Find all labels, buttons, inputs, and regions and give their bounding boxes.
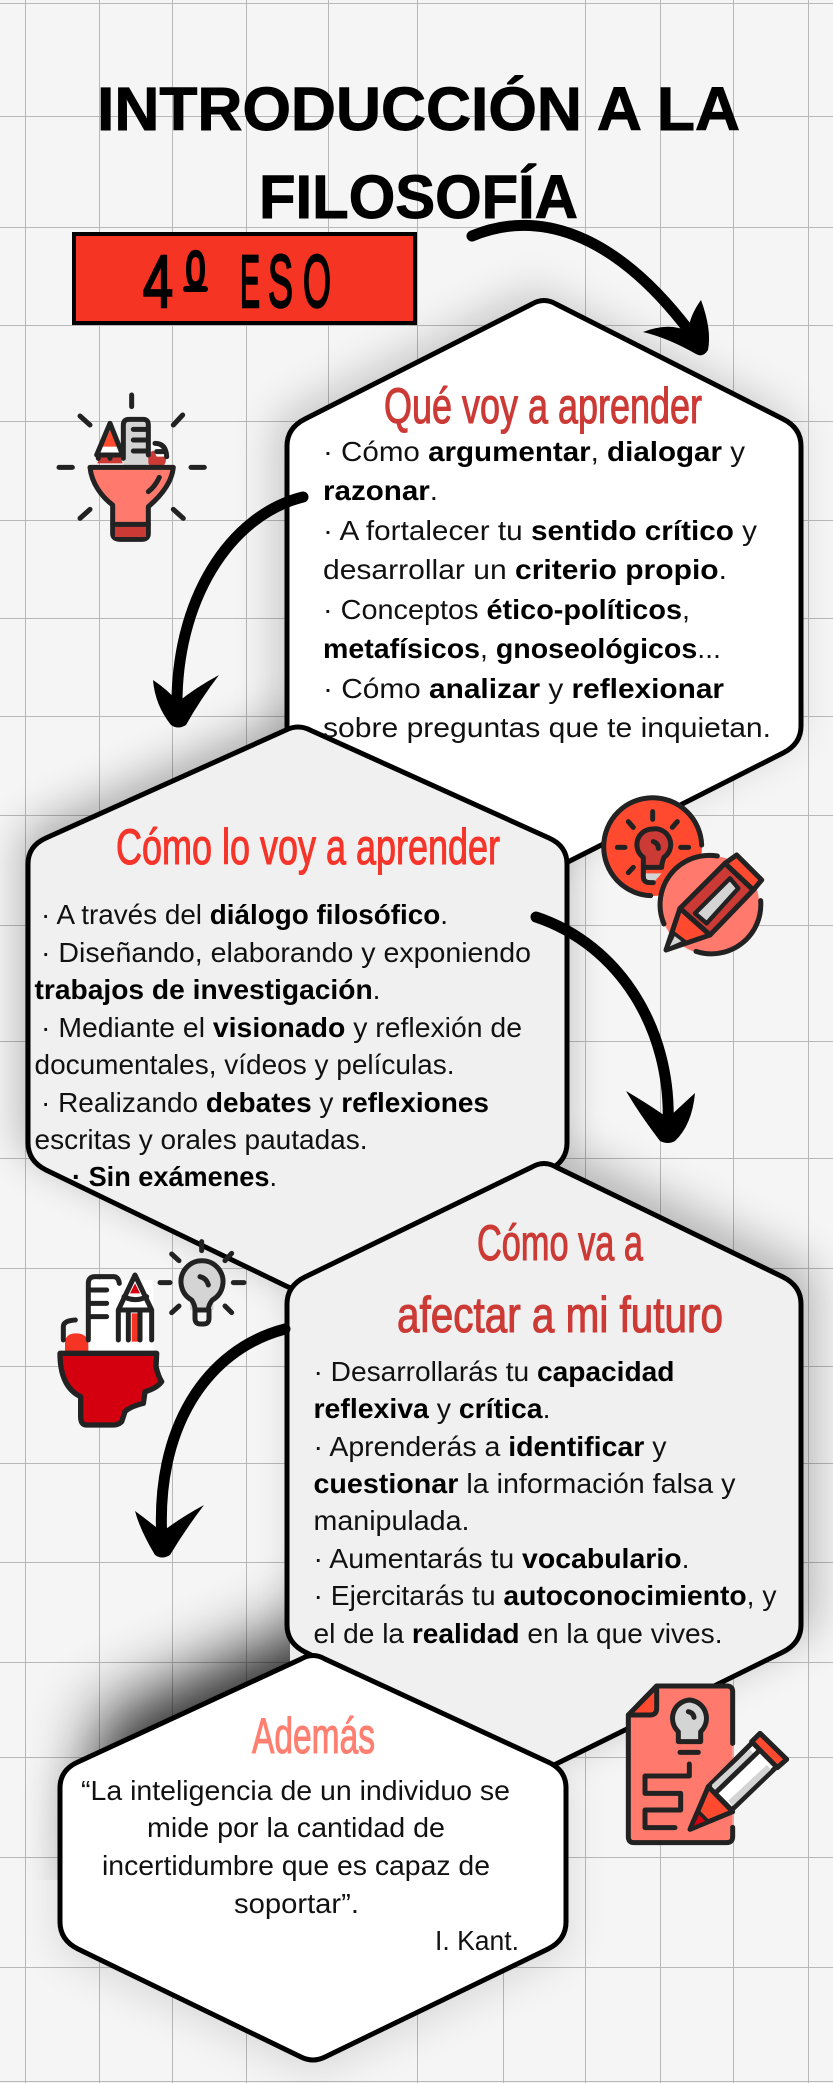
text block: cómo va a afectar a mi futuro: reflexiva y crítica. — [314, 1393, 550, 1424]
heading: cómo va a afectar a mi futuro: Cómo va a — [477, 1215, 643, 1271]
text block: qué voy a aprender: metafísicos, gnoseológicos... — [323, 633, 721, 664]
text block: Kant quote — [81, 1775, 519, 1956]
arrow: first to second hexagon — [153, 497, 303, 728]
text block: cómo lo voy a aprender: trabajos de investigación. — [34, 974, 380, 1005]
icon: head with ruler, pencil and bulb — [60, 1242, 244, 1425]
icon: document with bulb and pencil — [628, 1686, 787, 1843]
text block: cómo va a afectar a mi futuro: manipulada. — [314, 1505, 470, 1536]
text block: qué voy a aprender: sobre preguntas que te inquietan. — [323, 712, 771, 743]
course badge: 4º ESO: S — [268, 240, 293, 323]
text block: qué voy a aprender: · Cómo argumentar , dialogar y — [323, 436, 745, 467]
course badge: 4º ESO: E — [240, 240, 260, 323]
heading: qué voy a aprender: Qué voy a aprender — [384, 378, 702, 434]
text block: cómo va a afectar a mi futuro: · Desarrollarás tu capacidad — [314, 1356, 674, 1387]
title: INTRODUCCIÓN A LA — [97, 75, 740, 143]
text block: qué voy a aprender: razonar. — [323, 475, 438, 506]
heading: cómo lo voy a aprender: Cómo lo voy a aprender — [116, 819, 500, 875]
text block: qué voy a aprender: · Cómo analizar y reflexionar — [323, 673, 724, 704]
text block: cómo lo voy a aprender: · Mediante el visionado y reflexión de — [41, 1012, 522, 1043]
text block: Kant quote: incertidumbre que es capaz de — [102, 1850, 490, 1881]
text block: Kant quote: “La inteligencia de un individuo se — [81, 1775, 510, 1806]
heading: cómo va a afectar a mi futuro: afectar a mi futuro — [397, 1287, 723, 1343]
text block: cómo va a afectar a mi futuro: el de la realidad en la que vives. — [314, 1618, 722, 1649]
panel: además hexagon — [60, 1656, 566, 2060]
text block: cómo lo voy a aprender: escritas y orales pautadas. — [34, 1124, 368, 1155]
course badge: 4º ESO — [74, 232, 415, 339]
text block: qué voy a aprender — [323, 436, 771, 743]
text block: cómo lo voy a aprender: · Realizando debates y reflexiones — [41, 1087, 489, 1118]
text block: Kant quote: I. Kant. — [435, 1925, 519, 1956]
arrow: title to first hexagon — [472, 225, 709, 355]
panel: cómo lo voy a aprender hexagon — [28, 727, 567, 1289]
course badge: 4º ESO: º — [186, 232, 205, 339]
arrow: third to fourth hexagon — [135, 1329, 285, 1558]
text block: Kant quote: soportar”. — [234, 1888, 359, 1919]
icon: bulb with pencil and ruler — [59, 395, 204, 539]
text block: cómo va a afectar a mi futuro — [314, 1356, 776, 1649]
text block: cómo lo voy a aprender: documentales, vídeos y películas. — [34, 1049, 454, 1080]
panel: qué voy a aprender hexagon — [287, 300, 801, 872]
arrow: second to third hexagon — [536, 917, 695, 1143]
title — [97, 75, 740, 231]
text block: cómo va a afectar a mi futuro: cuestionar la información falsa y — [314, 1468, 736, 1499]
text block: cómo lo voy a aprender: · Sin exámenes. — [72, 1161, 277, 1192]
heading: además: Además — [252, 1708, 375, 1764]
text block: cómo lo voy a aprender: · A través del diálogo filosófico. — [41, 899, 448, 930]
text block: cómo lo voy a aprender: · Diseñando, elaborando y exponiendo — [41, 937, 531, 968]
text block: cómo lo voy a aprender — [34, 899, 531, 1192]
course badge: 4º ESO: O — [303, 240, 331, 323]
text block: qué voy a aprender: desarrollar un criterio propio . — [323, 554, 727, 585]
text block: qué voy a aprender: · Conceptos ético-políticos, — [323, 594, 690, 625]
panel: cómo va a afectar a mi futuro hexagon — [287, 1164, 801, 1767]
course badge: 4º ESO: 4 — [143, 240, 173, 323]
text block: cómo va a afectar a mi futuro: · Aumentarás tu vocabulario. — [314, 1543, 690, 1574]
text block: Kant quote: mide por la cantidad de — [147, 1812, 445, 1843]
title: FILOSOFÍA — [259, 163, 578, 231]
text block: cómo va a afectar a mi futuro: · Aprenderás a identificar y — [314, 1431, 666, 1462]
icon: bulb and pencil circles — [603, 797, 762, 954]
text block: cómo va a afectar a mi futuro: · Ejercitarás tu autoconocimiento, y — [314, 1580, 776, 1611]
text block: qué voy a aprender: · A fortalecer tu sentido crítico y — [323, 515, 757, 546]
heading: cómo va a afectar a mi futuro — [397, 1215, 723, 1343]
